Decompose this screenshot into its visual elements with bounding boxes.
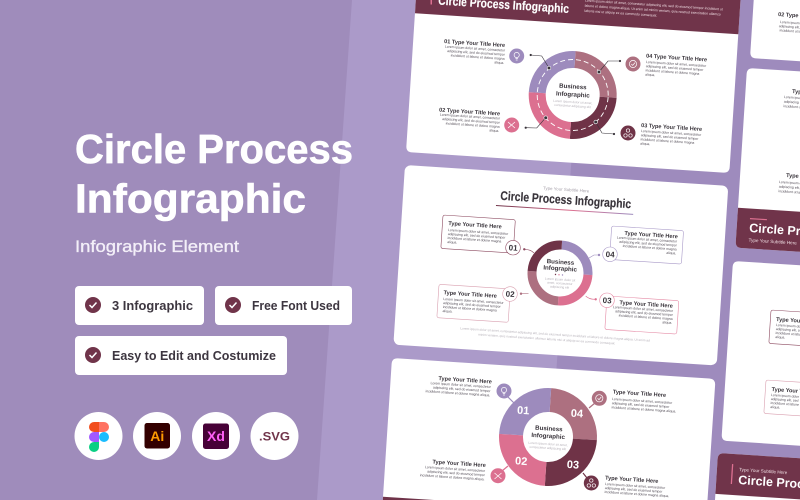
icon: SVG format (250, 412, 298, 460)
item 02: adipiscing elit, sed do eiusmod tempor (427, 469, 486, 477)
ring two centre label: amet, consectetur (547, 280, 574, 286)
ring three centre label: Lorem ipsum dolor sit amet, (528, 441, 568, 447)
ring three centre label: Infographic (531, 432, 566, 441)
step 01: Lorem ipsum dolor sit amet, consectetur (445, 45, 506, 53)
callout 04 (589, 226, 684, 264)
step 03: adipiscing elit, sed do eiusmod tempor (641, 133, 699, 141)
item 01: adipiscing elit, sed do eiusmod tempor (433, 385, 491, 393)
item 04: adipiscing elit, sed do eiusmod tempor (612, 401, 670, 409)
step 02: adipiscing elit, sed do eiusmod tempor (442, 117, 501, 125)
donut ring three (509, 398, 587, 476)
feature pill: Easy to Edit and Costumize (75, 336, 287, 375)
ring one centre label: Infographic (556, 90, 590, 100)
step 02 (439, 108, 548, 133)
subtitle: Infographic Element (75, 237, 239, 256)
callout 04: aliqua. (666, 251, 676, 255)
feature pill: Free Font Used: Free Font Used (252, 299, 340, 313)
ring three centre label (528, 425, 568, 451)
slide one background (406, 0, 740, 173)
ring three numbers: 03 (566, 459, 579, 472)
icon: Adobe XD (192, 412, 240, 460)
item 03: incididunt ut labore et dolore magna aliqua. (604, 490, 669, 498)
step 04: incididunt ut labore et dolore magna (645, 68, 700, 76)
main title: Infographic (75, 176, 306, 222)
step 04: adipiscing elit, sed do eiusmod tempor (646, 64, 704, 72)
right slide footer title: Type Your Subtitle Here (748, 238, 797, 246)
step 03: aliqua. (640, 142, 650, 146)
callout 02: Type Your Title Here (443, 290, 497, 300)
panel: right slide, top (750, 0, 800, 61)
ring three centre label: Business (535, 425, 563, 433)
callout 02 (437, 284, 528, 322)
icon: Adobe Illustrator (133, 412, 181, 460)
slide two footnote: Lorem ipsum dolor sit amet, consectetur adipiscing elit, sed do eiusmod tempor incididunt ut labore et dolore magna aliqua. Ut enim ad (460, 326, 650, 343)
step 02: 02 Type Your Title Here (439, 108, 500, 117)
ring two centre label: Business (546, 258, 575, 267)
item 04: Lorem ipsum dolor sit amet, consectetur (612, 397, 673, 405)
icon: SVG format: .SVG (259, 430, 290, 444)
step 02: Lorem ipsum dolor sit amet, consectetur (440, 113, 501, 121)
ring one centre label: Lorem ipsum dolor sit amet, (553, 99, 593, 105)
callout 04: incididunt ut labore et dolore magna (623, 244, 677, 251)
panel: right slide, bottom header (715, 453, 800, 500)
right slide box two: adipiscing elit, sed (771, 397, 799, 403)
callout 01: 01 (508, 243, 518, 253)
ring three numbers: 04 (570, 408, 584, 420)
ring one centre label: Business (559, 83, 587, 91)
callout 02: incididunt ut labore et dolore magna (443, 305, 497, 312)
item 01 (425, 376, 514, 403)
callout 03: adipiscing elit, sed do eiusmod tempor (615, 309, 674, 317)
item 02: Type Your Title Here (432, 460, 486, 469)
ring two centre label: Lorem ipsum dolor sit (545, 277, 576, 282)
callout 02: Lorem ipsum dolor sit amet, consectetur (443, 297, 505, 305)
step 01: adipiscing elit, sed do eiusmod tempor (447, 49, 506, 57)
panel: slide three, solid pie (383, 358, 715, 500)
item 01: Lorem ipsum dolor sit amet, consectetur (430, 381, 492, 389)
callout 03: aliqua. (662, 320, 672, 325)
right slide box two: incididunt ut labore (770, 401, 799, 407)
panel: slide one, header and ring (406, 0, 740, 173)
callout 04: adipiscing elit, sed do eiusmod tempor (619, 240, 678, 248)
callout 01: Lorem ipsum dolor sit amet, consectetur (448, 228, 509, 236)
ring three centre label: consectetur adipiscing elit (529, 445, 566, 451)
item 03: Type Your Title Here (605, 476, 659, 485)
slide one header description: labore et dolore magna aliqua. Ut enim ad minim veniam, quis nostrud exercitation ullamco (585, 4, 721, 16)
slide three background (383, 358, 715, 500)
donut ring one (535, 57, 610, 133)
panel: right slide, with footer (736, 68, 800, 252)
callout 03 (586, 293, 679, 334)
ring two centre label: Infographic (543, 264, 578, 274)
panel: right slide, bottom header: Type Your Subtitle Here (739, 467, 788, 475)
item 02 (420, 460, 508, 483)
slide one header description: laboris nisi ut aliquip ex ea commodo consequat. (584, 9, 658, 18)
right slide box two: aliqua. (770, 405, 780, 410)
step 03: incididunt ut labore et dolore magna (640, 137, 695, 145)
item 02: Lorem ipsum dolor sit amet, consectetur (425, 465, 486, 473)
icon: Figma (74, 412, 122, 460)
feature pill: 3 Infographic (75, 286, 204, 325)
item 03: adipiscing elit, sed do eiusmod tempor (605, 486, 663, 494)
feature pill: 3 Infographic: 3 Infographic (112, 299, 193, 313)
item 04 (589, 390, 677, 414)
step 02: aliqua. (489, 128, 499, 133)
callout 01: Type Your Title Here (448, 221, 502, 230)
callout 01: adipiscing elit, sed do eiusmod tempor (448, 232, 506, 240)
ring two centre label (543, 258, 578, 290)
step 04: 04 Type Your Title Here (646, 54, 707, 63)
ring one centre label: consectetur adipiscing elit (554, 103, 591, 109)
callout 04: Type Your Title Here (624, 231, 678, 240)
callout 01: aliqua. (447, 240, 457, 245)
slide two subtitle: Type Your Subtitle Here (543, 186, 590, 194)
ring three numbers: 01 (517, 405, 530, 417)
panel: slide two, boxed callouts (393, 165, 728, 366)
step 03 (594, 120, 702, 150)
step 03: Lorem ipsum dolor sit amet, consectetur (641, 129, 702, 137)
ring three numbers (515, 405, 584, 472)
item 01: Type Your Title Here (438, 376, 492, 385)
step 02: incididunt ut labore et dolore magna (446, 121, 500, 129)
donut ring two (530, 243, 590, 303)
step 04: Lorem ipsum dolor sit amet, consectetur (646, 60, 707, 68)
panel: right slide, boxes (722, 261, 800, 446)
callout 03: Type Your Title Here (619, 300, 673, 310)
right slide body text (778, 89, 800, 196)
step 04: aliqua. (645, 73, 655, 77)
ring three numbers: 02 (515, 455, 528, 468)
step 04 (597, 54, 707, 81)
callout 01: incididunt ut labore et dolore magna (447, 236, 502, 243)
slide three footer band (383, 497, 434, 500)
callout 04: 04 (605, 250, 615, 259)
item 03 (583, 473, 670, 498)
icon: Adobe XD: Xd (207, 428, 225, 444)
ring two centre label: adipiscing elit (550, 284, 569, 290)
right slide box two (764, 380, 800, 418)
main title: Circle Process (75, 126, 353, 172)
item 02: incididunt ut labore et dolore magna aliqua. (420, 473, 485, 481)
step 01: aliqua. (494, 60, 504, 65)
callout 02: aliqua. (442, 309, 453, 314)
step 03: 03 Type Your Title Here (641, 123, 702, 133)
right slide box one (769, 310, 800, 348)
slide two footnote: minim veniam, quis nostrud exercitation ullamco laboris nisi ut aliquip ex ea commodo consequat. (478, 333, 616, 345)
callout 01 (441, 215, 534, 255)
item 04: Type Your Title Here (613, 390, 666, 399)
ring one centre label (553, 83, 593, 109)
item 01: incididunt ut labore et dolore magna aliqua. (425, 389, 490, 397)
feature pill: Easy to Edit and Costumize: Easy to Edit and Costumize (112, 349, 276, 363)
callout 02: 02 (505, 290, 515, 299)
step 01 (444, 39, 551, 70)
item 04: incididunt ut labore et dolore magna aliqua. (611, 405, 676, 414)
callout 03: incididunt ut labore et dolore magna (619, 314, 673, 321)
callout 03: Lorem ipsum dolor sit amet, consectetur (613, 305, 674, 313)
slide two title: Circle Process Infographic (500, 189, 632, 211)
right slide box one: aliqua. (775, 335, 785, 340)
callout 04: Lorem ipsum dolor sit amet, consectetur (617, 236, 678, 244)
slide two background (393, 165, 728, 366)
main title (75, 126, 353, 222)
item 03: Lorem ipsum dolor sit amet, consectetur (605, 482, 666, 490)
right slide footer band (736, 208, 800, 252)
slide one header band (415, 0, 740, 34)
feature pill: Free Font Used (215, 286, 352, 325)
callout 02: adipiscing elit, sed do eiusmod tempor (443, 301, 502, 309)
callout 03: 03 (602, 296, 612, 305)
title underline (496, 205, 633, 215)
icon: Adobe Illustrator: Ai (150, 428, 164, 444)
step 01: 01 Type Your Title Here (444, 39, 505, 49)
step 01: incididunt ut labore et dolore magna (451, 53, 505, 61)
